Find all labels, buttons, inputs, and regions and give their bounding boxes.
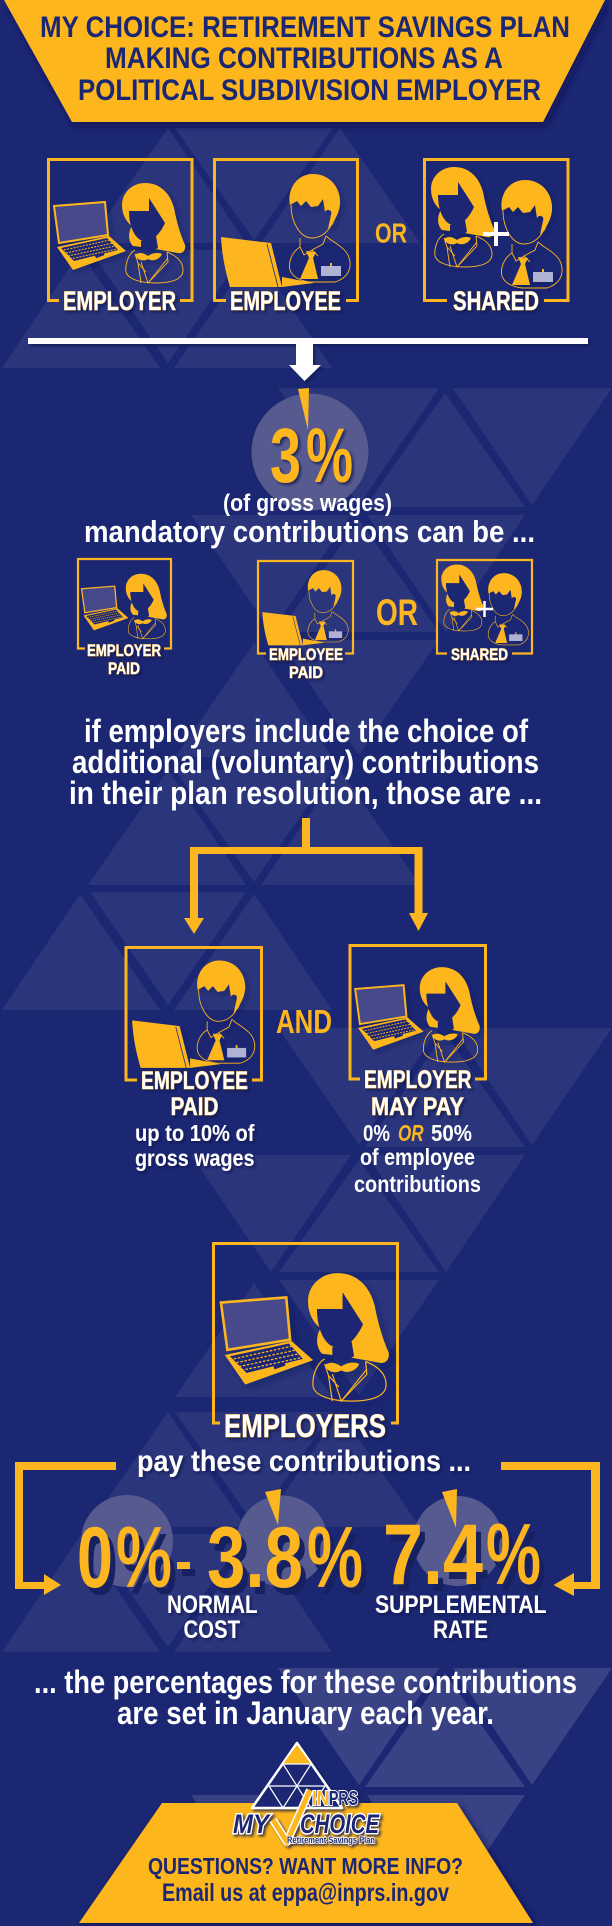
title banner: POLITICAL SUBDIVISION EMPLOYER [78, 74, 541, 107]
panel: employee paid: EMPLOYEE [269, 645, 343, 664]
panel: employee paid voluntary [126, 948, 262, 1171]
text: voluntary contributions: if employers include the choice of [84, 713, 528, 749]
text: pay these contributions: pay these contributions ... [137, 1445, 471, 1478]
title banner [4, 0, 605, 122]
text: percentages note [34, 1664, 577, 1731]
text: of gross wages: (of gross wages) [223, 490, 392, 517]
logo: INPRS My Choice: MY [233, 1809, 272, 1839]
logo: INPRS My Choice: CHOICE [300, 1809, 380, 1839]
chart: normal cost pies: 0 [77, 1510, 113, 1606]
panel: employer may pay: OR [398, 1120, 424, 1146]
chart: 3 percent pie [252, 388, 368, 510]
panel: employee paid: PAID [289, 663, 323, 682]
footer panel: QUESTIONS? WANT MORE INFO? [148, 1853, 463, 1879]
panel: employee: EMPLOYEE [230, 286, 341, 316]
panel: employer paid: PAID [108, 659, 140, 678]
text: percentages note: are set in January each year. [117, 1695, 494, 1731]
footer panel [79, 1803, 533, 1923]
logo: INPRS My Choice: Retirement Savings Plan [287, 1835, 375, 1845]
panel: employers: EMPLOYERS [224, 1408, 386, 1444]
panel: employer paid: EMPLOYER [87, 641, 161, 660]
arrow: left bracket [15, 1462, 116, 1595]
panel: employee paid voluntary: EMPLOYEE [141, 1067, 248, 1095]
panel: employer [48, 160, 192, 316]
text: or: OR [376, 592, 418, 633]
panel: employer: EMPLOYER [63, 286, 176, 316]
panel: employer paid [78, 559, 171, 678]
chart: 3 percent pie: 3 [270, 413, 301, 499]
chart: normal cost pies: % [116, 1510, 172, 1606]
panel: employer may pay: contributions [354, 1171, 481, 1197]
logo: INPRS My Choice: IN [312, 1788, 329, 1810]
chart: supplemental rate pie: % [486, 1507, 541, 1603]
logo: INPRS My Choice: PRS [329, 1788, 358, 1810]
panel: shared [424, 160, 568, 316]
panel: employer may pay: MAY PAY [371, 1093, 464, 1121]
panel: employers [214, 1244, 398, 1444]
chart: normal cost pies: % [307, 1510, 363, 1606]
panel: employer may pay: of employee [360, 1144, 475, 1170]
text: voluntary contributions: in their plan resolution, those are ... [69, 775, 542, 811]
title banner: MAKING CONTRIBUTIONS AS A [105, 42, 503, 75]
panel: employee paid [258, 561, 353, 682]
chart: normal cost pies: 3.8 [207, 1510, 303, 1606]
panel: employer may pay: 50% [431, 1120, 472, 1146]
text: voluntary contributions: additional (voluntary) contributions [72, 744, 539, 780]
panel: employer may pay: 0% [363, 1120, 390, 1146]
chart: 3 percent pie: % [306, 413, 353, 499]
arrow: right bracket [501, 1462, 600, 1596]
panel: employer may pay: EMPLOYER [364, 1066, 472, 1094]
chart: supplemental rate pie: 7.4 [383, 1507, 483, 1603]
divider bar and arrow [28, 338, 588, 381]
panel: employee [214, 160, 358, 316]
chart: supplemental rate pie: SUPPLEMENTAL [375, 1591, 546, 1619]
panel: shared: SHARED [453, 286, 539, 316]
chart: supplemental rate pie: RATE [433, 1616, 488, 1644]
footer panel: Email us at eppa@inprs.in.gov [162, 1879, 449, 1907]
text: voluntary contributions [69, 713, 542, 811]
chart: normal cost pies [77, 1489, 363, 1644]
chart: normal cost pies: COST [184, 1616, 240, 1644]
panel: shared small [437, 560, 532, 664]
arrow: branching connector [184, 818, 428, 934]
text: or: OR [375, 218, 407, 249]
panel: employee paid voluntary: up to 10% of [135, 1120, 255, 1146]
heading: mandatory contributions: mandatory contributions can be ... [84, 514, 535, 549]
panel: employee paid voluntary: PAID [170, 1093, 218, 1121]
panel: employer may pay [350, 946, 486, 1197]
chart: supplemental rate pie [375, 1489, 546, 1644]
logo: INPRS My Choice [233, 1743, 380, 1845]
panel: shared small: SHARED [451, 645, 508, 664]
text: and: AND [276, 1003, 332, 1040]
panel: employee paid voluntary: gross wages [135, 1145, 254, 1171]
chart: normal cost pies: NORMAL [167, 1591, 258, 1619]
